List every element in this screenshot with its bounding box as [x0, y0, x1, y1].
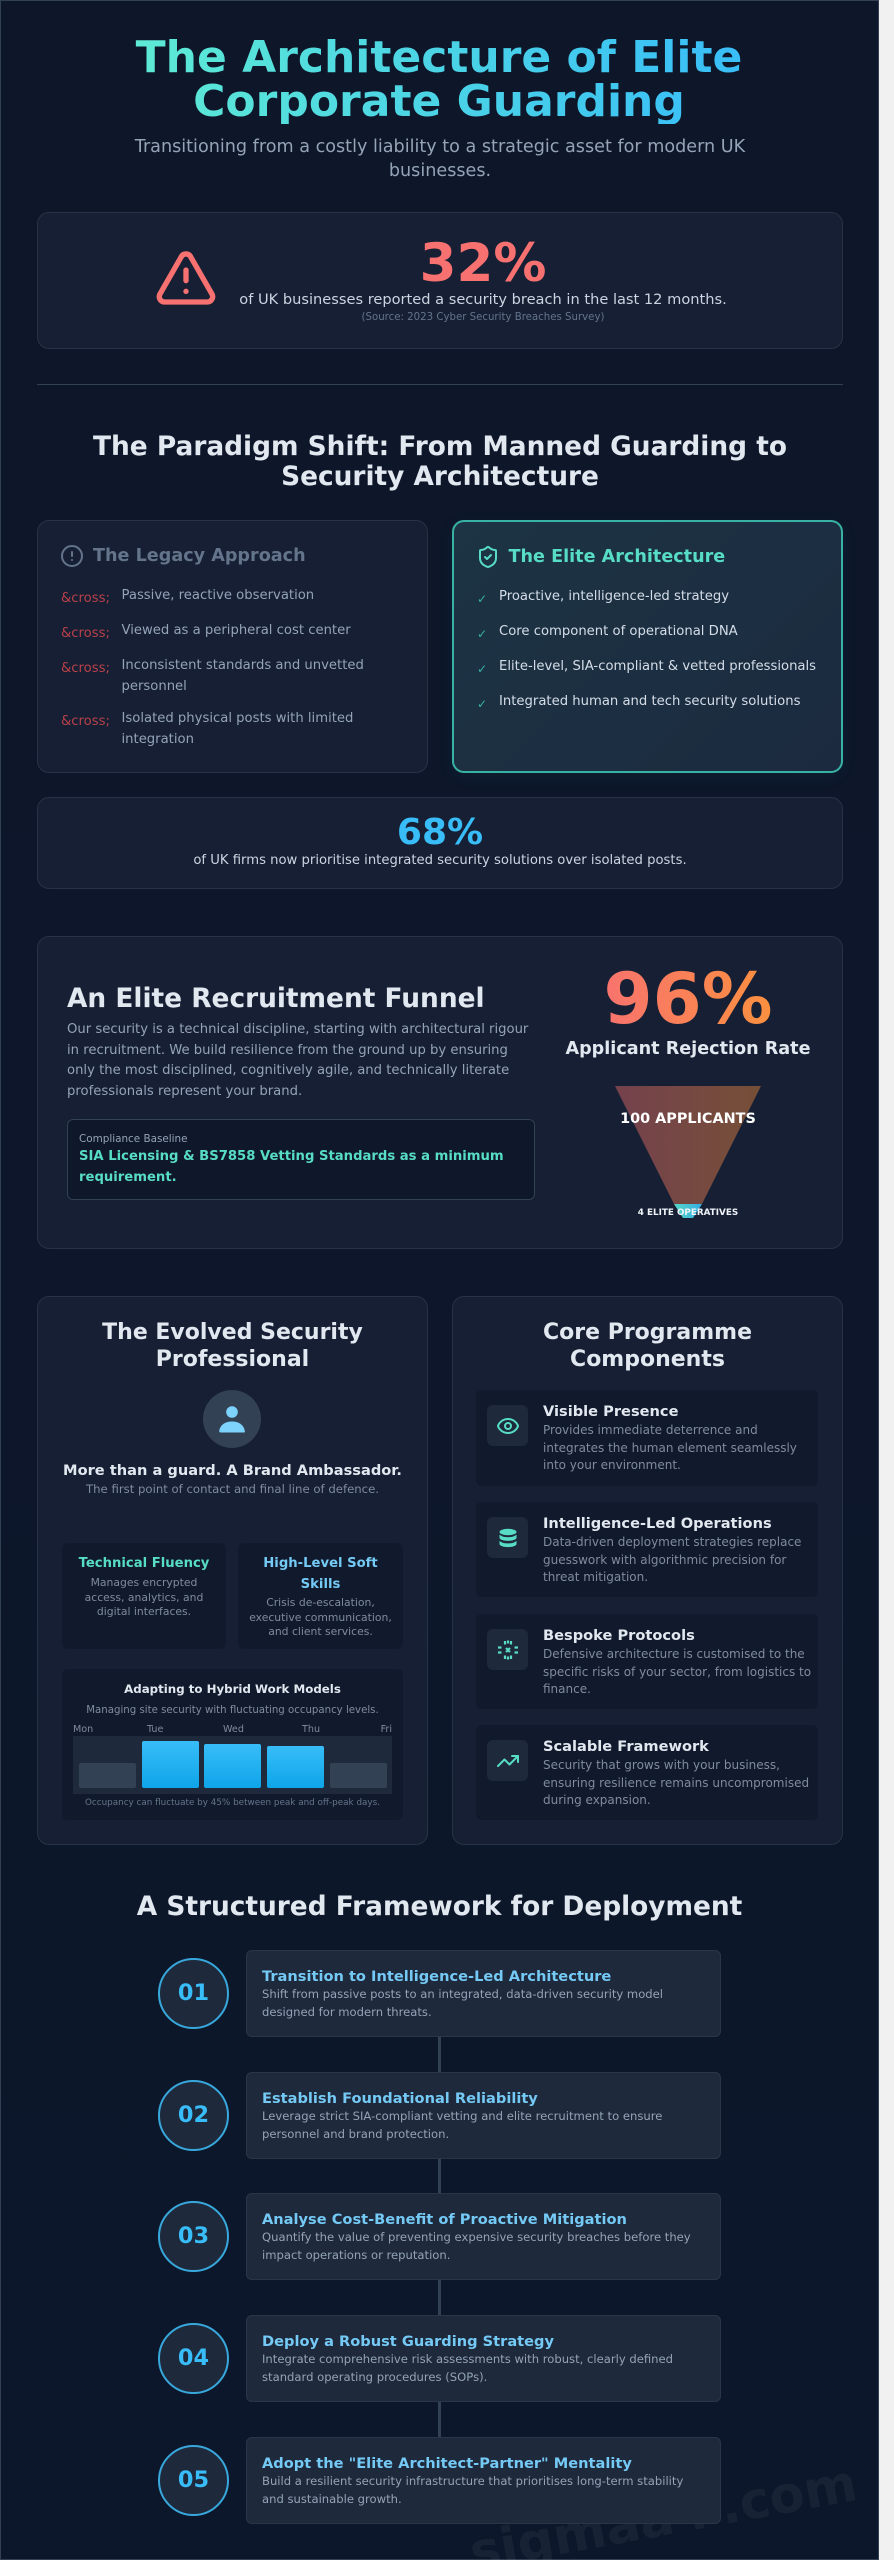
- card: visible presence: [476, 1390, 818, 1486]
- card: visible presence: into your environment.: [543, 1458, 681, 1472]
- legacy list: integration: [122, 732, 194, 746]
- icon: shield check: [479, 546, 497, 568]
- step 4 card: [246, 2315, 721, 2402]
- legacy list: Passive, reactive observation: [122, 588, 314, 603]
- divider: [37, 384, 843, 385]
- step 3 card: Quantify the value of preventing expensive security breaches before they: [262, 2230, 691, 2244]
- icon: database: [487, 1517, 528, 1558]
- day labels: Mon: [73, 1724, 93, 1735]
- card: bespoke protocols: specific risks of your sector, from logistics to: [543, 1664, 811, 1678]
- legacy list: &cross;: [61, 714, 110, 729]
- heading: paradigm shift: [93, 431, 787, 492]
- step 2 card: personnel and brand protection.: [262, 2126, 449, 2140]
- panel: elite architecture: [452, 520, 843, 773]
- stat description: of UK businesses reported a security breach in the last 12 months.: [239, 291, 727, 308]
- stat: 96%: 96%: [604, 957, 772, 1040]
- step 2 card: [246, 2072, 721, 2159]
- step 2 number: 02: [178, 2102, 209, 2128]
- stat description: of UK firms now prioritise integrated security solutions over isolated posts.: [193, 853, 687, 868]
- elite list: ✓: [477, 662, 487, 676]
- card: soft skills: High-Level Soft: [263, 1556, 378, 1571]
- icon: eye: [487, 1405, 528, 1446]
- step 5 card: Build a resilient security infrastructure that prioritises long-term stability: [262, 2474, 683, 2488]
- step 1 number: [158, 1958, 229, 2029]
- panel: legacy approach: [37, 520, 428, 773]
- chart subtitle: Managing site security with fluctuating occupancy levels.: [86, 1705, 379, 1716]
- heading: evolved professional: The Evolved Security: [102, 1320, 363, 1345]
- step 5 number: [158, 2445, 229, 2516]
- funnel bottom label: 4 ELITE OPERATIVES: [638, 1208, 738, 1218]
- recruitment paragraph: [67, 1022, 528, 1098]
- compliance label: Compliance Baseline: [79, 1133, 188, 1145]
- card: scalable framework: ensuring resilience remains uncompromised: [543, 1776, 809, 1790]
- card: technical fluency: access, analytics, and: [85, 1591, 203, 1604]
- step 1 card: Transition to Intelligence-Led Architecture: [262, 1968, 611, 1985]
- card: scalable framework: during expansion.: [543, 1793, 651, 1807]
- step 4 number: [158, 2323, 229, 2394]
- compliance text: [79, 1149, 504, 1184]
- card: soft skills: and client services.: [268, 1625, 373, 1638]
- card: technical fluency: Technical Fluency: [79, 1556, 209, 1571]
- heading: core programme: Components: [570, 1347, 725, 1372]
- ambassador subtext: The first point of contact and final line of defence.: [86, 1482, 379, 1496]
- step 5 card: [246, 2437, 721, 2524]
- chart title: Adapting to Hybrid Work Models: [124, 1682, 341, 1696]
- funnel top label: 100 APPLICANTS: [620, 1111, 756, 1127]
- heading: evolved professional: [102, 1320, 363, 1372]
- icon: scan target: [487, 1629, 528, 1670]
- legacy list: personnel: [122, 678, 187, 694]
- card: intelligence-led operations: [476, 1502, 818, 1597]
- connector line: [438, 2279, 441, 2315]
- compliance text: SIA Licensing & BS7858 Vetting Standards as a minimum: [79, 1149, 504, 1164]
- recruitment paragraph: only the most disciplined, cognitively agile, and technically literate: [67, 1063, 509, 1078]
- heading: evolved professional: Professional: [156, 1347, 309, 1372]
- card: visible presence: integrates the human element seamlessly: [543, 1440, 797, 1454]
- card: technical fluency: Manages encrypted: [91, 1576, 197, 1589]
- card: bespoke protocols: finance.: [543, 1682, 591, 1696]
- day labels: Thu: [302, 1724, 320, 1735]
- step 5 card: and sustainable growth.: [262, 2492, 402, 2506]
- panel: breach statistic: [37, 212, 843, 349]
- step 4 number: 04: [178, 2345, 209, 2371]
- card: intelligence-led operations: Intelligence-Led Operations: [543, 1515, 772, 1532]
- day labels: Tue: [147, 1724, 163, 1735]
- panel: 68% statistic: [37, 797, 843, 889]
- stat label: Applicant Rejection Rate: [565, 1039, 811, 1059]
- heading: paradigm shift: Security Architecture: [281, 460, 599, 492]
- elite list: Proactive, intelligence-led strategy: [499, 589, 729, 604]
- step 2 number: [158, 2080, 229, 2151]
- title: [130, 36, 748, 124]
- connector line: [438, 2036, 441, 2072]
- step 3 card: impact operations or reputation.: [262, 2248, 450, 2262]
- source note: (Source: 2023 Cyber Security Breaches Survey): [362, 312, 604, 323]
- panel: evolved security professional: [37, 1296, 428, 1845]
- stat: 96%: [568, 957, 808, 1041]
- elite list: ✓: [477, 697, 487, 711]
- card: bespoke protocols: Defensive architecture is customised to the: [543, 1647, 805, 1661]
- card: visible presence: Visible Presence: [543, 1403, 678, 1420]
- step 4 card: standard operating procedures (SOPs).: [262, 2370, 487, 2384]
- title: The Architecture of Elite: [136, 32, 742, 83]
- card: technical fluency: digital interfaces.: [97, 1605, 191, 1618]
- card: intelligence-led operations: guesswork with algorithmic precision for: [543, 1552, 786, 1566]
- icon: warning triangle: [156, 251, 216, 305]
- day labels: Fri: [381, 1724, 392, 1735]
- card: intelligence-led operations: Data-driven deployment strategies replace: [543, 1535, 801, 1549]
- legacy list: &cross;: [61, 626, 110, 641]
- stat: 68%: 68%: [397, 812, 483, 853]
- legacy list: Isolated physical posts with limited: [122, 711, 353, 726]
- legacy list: [61, 588, 364, 746]
- step 1 card: designed for modern threats.: [262, 2004, 432, 2018]
- card: soft skills: executive communication,: [249, 1611, 392, 1624]
- recruitment paragraph: Our security is a technical discipline, starting with architectural rigour: [67, 1022, 528, 1037]
- recruitment paragraph: professionals represent your brand.: [67, 1084, 302, 1098]
- elite list: [477, 589, 816, 711]
- step 3 number: [158, 2201, 229, 2272]
- legacy list: &cross;: [61, 591, 110, 606]
- connector line: [438, 2158, 441, 2194]
- step 2 card: Leverage strict SIA-compliant vetting and elite recruitment to ensure: [262, 2109, 662, 2123]
- compliance callout: [67, 1119, 535, 1200]
- step 4 card: Deploy a Robust Guarding Strategy: [262, 2333, 554, 2350]
- heading: core programme: [543, 1320, 752, 1372]
- card: bespoke protocols: Bespoke Protocols: [543, 1627, 695, 1644]
- connector line: [438, 2401, 441, 2437]
- legacy list: &cross;: [61, 661, 110, 676]
- compliance text: requirement.: [79, 1170, 177, 1184]
- card: scalable framework: [476, 1725, 818, 1820]
- ambassador heading: More than a guard. A Brand Ambassador.: [63, 1462, 402, 1479]
- panel: recruitment funnel: [37, 936, 843, 1249]
- stat: 32%: 32%: [420, 233, 546, 294]
- subtitle: businesses.: [389, 160, 491, 180]
- card: intelligence-led operations: threat mitigation.: [543, 1570, 648, 1584]
- elite list: Elite-level, SIA-compliant & vetted professionals: [499, 659, 816, 674]
- title: Corporate Guarding: [193, 76, 685, 127]
- step 1 card: Shift from passive posts to an integrated, data-driven security model: [262, 1987, 663, 2001]
- elite list: Integrated human and tech security solutions: [499, 694, 800, 709]
- heading: deployment framework: A Structured Framework for Deployment: [137, 1891, 742, 1922]
- legacy list: Viewed as a peripheral cost center: [122, 623, 351, 638]
- heading: recruitment funnel: An Elite Recruitment Funnel: [67, 983, 485, 1014]
- icon: trending up: [487, 1740, 528, 1781]
- card: scalable framework: Scalable Framework: [543, 1738, 709, 1755]
- icon: person avatar: [203, 1390, 261, 1448]
- card: soft skills: [238, 1543, 403, 1649]
- card: soft skills: Crisis de-escalation,: [266, 1596, 375, 1609]
- step 5 card: Adopt the "Elite Architect-Partner" Mentality: [262, 2455, 632, 2472]
- card: technical fluency: [62, 1543, 226, 1649]
- step 4 card: Integrate comprehensive risk assessments with robust, clearly defined: [262, 2352, 673, 2366]
- panel: hybrid work chart: [62, 1669, 403, 1820]
- step 3 card: [246, 2193, 721, 2280]
- step 5 number: 05: [178, 2467, 209, 2493]
- step 1 card: [246, 1950, 721, 2037]
- step 3 card: Analyse Cost-Benefit of Proactive Mitigation: [262, 2211, 627, 2228]
- icon: alert circle: [61, 545, 83, 567]
- subtitle: Transitioning from a costly liability to a strategic asset for modern UK: [135, 137, 745, 157]
- panel: core programme components: [452, 1296, 843, 1845]
- subtitle: [134, 137, 746, 180]
- day labels: [73, 1724, 392, 1735]
- bar chart: [73, 1736, 392, 1794]
- funnel chart: [615, 1086, 761, 1218]
- legacy list: Inconsistent standards and unvetted: [122, 658, 364, 673]
- elite heading: The Elite Architecture: [508, 547, 725, 567]
- step 3 number: 03: [178, 2223, 209, 2249]
- day labels: Wed: [223, 1724, 244, 1735]
- heading: paradigm shift: The Paradigm Shift: From Manned Guarding to: [93, 431, 787, 462]
- heading: core programme: Core Programme: [543, 1320, 752, 1345]
- chart footnote: Occupancy can fluctuate by 45% between peak and off-peak days.: [85, 1798, 380, 1808]
- legacy heading: The Legacy Approach: [93, 546, 306, 566]
- recruitment paragraph: in recruitment. We build resilience from the ground up by ensuring: [67, 1042, 508, 1058]
- card: scalable framework: Security that grows with your business,: [543, 1758, 780, 1772]
- elite list: ✓: [477, 592, 487, 606]
- elite list: Core component of operational DNA: [499, 624, 738, 639]
- step 1 number: 01: [178, 1980, 209, 2006]
- step 2 card: Establish Foundational Reliability: [262, 2090, 538, 2107]
- elite list: ✓: [477, 627, 487, 641]
- card: soft skills: Skills: [301, 1576, 340, 1592]
- card: bespoke protocols: [476, 1614, 818, 1709]
- card: visible presence: Provides immediate deterrence and: [543, 1423, 758, 1437]
